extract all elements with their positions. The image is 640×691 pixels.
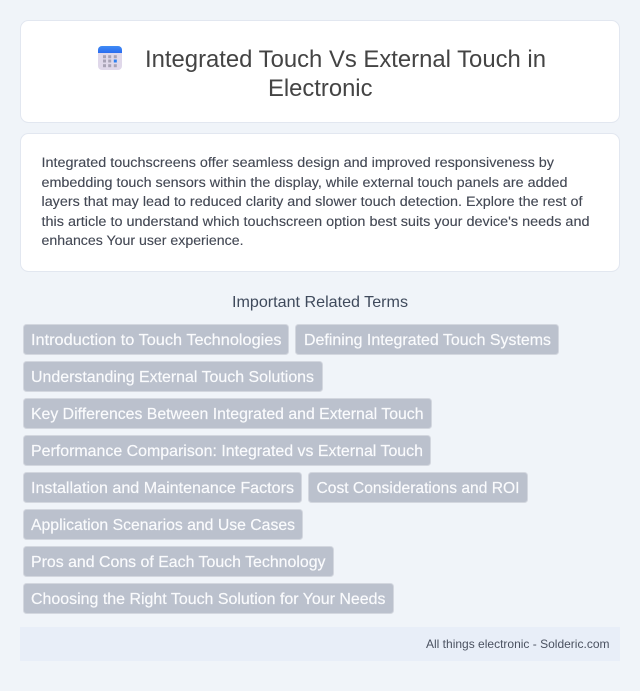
text block: introduction paragraph: Integrated touchscreens offer seamless design and improved responsiveness by — [42, 155, 555, 171]
tag: introduction to touch technologies: Introduction to Touch Technologies — [31, 332, 282, 349]
tag: application scenarios and use cases — [24, 510, 302, 540]
panel: title card — [20, 20, 620, 122]
tag: defining integrated touch systems: Defining Integrated Touch Systems — [304, 332, 551, 349]
text block: introduction paragraph: embedding touch sensors within the display, while external touch panels are added — [42, 175, 568, 191]
text block: introduction paragraph: layers that may lead to reduced clarity and slower touch detection. Explore the rest of — [42, 194, 583, 210]
title: Integrated Touch Vs External Touch in — [145, 46, 546, 73]
tag: application scenarios and use cases: Application Scenarios and Use Cases — [31, 517, 295, 534]
tag: key differences: Key Differences Between Integrated and External Touch — [31, 406, 424, 423]
tag: performance comparison — [24, 436, 430, 466]
title: Electronic — [268, 75, 372, 102]
footer — [20, 627, 620, 661]
tag: choosing the right touch solution: Choosing the Right Touch Solution for Your Needs — [31, 591, 386, 608]
tag: understanding external touch solutions — [24, 362, 322, 392]
tag: understanding external touch solutions: Understanding External Touch Solutions — [31, 369, 314, 386]
panel: introduction — [20, 134, 620, 272]
tag: pros and cons: Pros and Cons of Each Touch Technology — [31, 554, 326, 571]
icon: calendar — [98, 46, 122, 70]
panel: related term tags — [24, 324, 558, 614]
tag: cost considerations and roi — [308, 472, 528, 502]
text block: introduction paragraph — [42, 155, 590, 249]
tag: key differences — [24, 398, 432, 428]
text block: introduction paragraph: this article to understand which touchscreen option best suits your device's needs and — [42, 214, 590, 230]
heading: important related terms: Important Related Terms — [232, 294, 408, 311]
tag: performance comparison: Performance Comparison: Integrated vs External Touch — [31, 443, 423, 460]
tag: pros and cons — [24, 546, 334, 576]
tag: installation and maintenance factors: Installation and Maintenance Factors — [31, 480, 294, 497]
tag: introduction to touch technologies — [24, 324, 288, 354]
text block: introduction paragraph: enhances Your user experience. — [42, 233, 244, 249]
tag: defining integrated touch systems — [296, 324, 558, 354]
tag: installation and maintenance factors — [24, 472, 302, 502]
title — [145, 46, 546, 102]
tag: choosing the right touch solution — [24, 584, 394, 614]
footer: All things electronic - Solderic.com — [426, 637, 610, 651]
tag: cost considerations and roi: Cost Considerations and ROI — [316, 480, 520, 497]
